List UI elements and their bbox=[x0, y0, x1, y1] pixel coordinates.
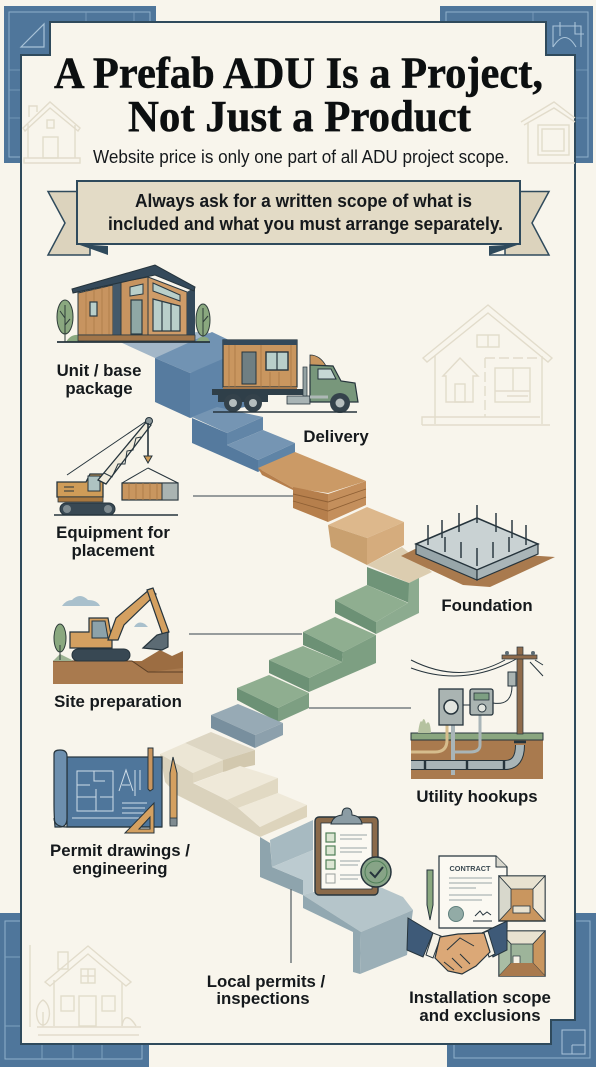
leader lines bbox=[189, 496, 411, 963]
stairs: beige section bbox=[160, 732, 307, 837]
title bbox=[54, 48, 543, 141]
icon: foundation slab bbox=[401, 505, 555, 587]
title: A Prefab ADU Is a Project, bbox=[54, 48, 543, 98]
label: foundation: Foundation bbox=[441, 596, 533, 615]
stairs: grey section bbox=[260, 820, 413, 974]
blueprint corner: bottom right bbox=[447, 913, 596, 1067]
icon: contract and handshake bbox=[407, 856, 545, 976]
ghost house: large right bbox=[422, 305, 552, 425]
icon: blueprint bbox=[54, 748, 177, 833]
label: equipment for placement: Equipment for bbox=[56, 523, 170, 542]
label: unit / base package: package bbox=[65, 379, 133, 398]
blueprint corner: bottom left bbox=[0, 913, 149, 1067]
label: permit drawings / engineering bbox=[50, 841, 190, 878]
label: unit / base package: Unit / base bbox=[57, 361, 141, 380]
label: equipment for placement bbox=[56, 523, 170, 560]
label: local permits / inspections: Local permits / bbox=[207, 972, 326, 991]
label: utility hookups: Utility hookups bbox=[416, 787, 538, 806]
ghost house: header right bbox=[521, 102, 575, 163]
stairs: green section bbox=[237, 567, 419, 722]
ribbon callout: included and what you must arrange separately. bbox=[108, 214, 503, 234]
ghost house: header left bbox=[23, 102, 80, 163]
ribbon callout: Always ask for a written scope of what is bbox=[135, 191, 472, 211]
label: local permits / inspections bbox=[207, 972, 326, 1008]
icon: inspection clipboard bbox=[315, 808, 391, 895]
label: local permits / inspections: inspections bbox=[216, 989, 310, 1008]
stairs: slate step bbox=[211, 704, 283, 748]
label: installation scope and exclusions bbox=[409, 988, 551, 1025]
title: Not Just a Product bbox=[128, 92, 471, 141]
staircase bbox=[120, 331, 432, 974]
icon: excavator bbox=[53, 588, 183, 684]
label: permit drawings / engineering: Permit drawings / bbox=[50, 841, 190, 860]
icon: delivery truck bbox=[212, 340, 358, 413]
label: site preparation: Site preparation bbox=[54, 692, 182, 711]
icon: prefab house bbox=[57, 265, 210, 342]
icon: contract and handshake: CONTRACT bbox=[450, 864, 491, 873]
ghost house: bottom left bbox=[30, 945, 141, 1035]
label: equipment for placement: placement bbox=[71, 541, 155, 560]
stairs: wood section bbox=[258, 452, 432, 583]
icon: utility hookups bbox=[411, 647, 543, 779]
subtitle: Website price is only one part of all ADU project scope. bbox=[93, 147, 509, 167]
stairs: blue section bbox=[120, 331, 295, 472]
label: permit drawings / engineering: engineering bbox=[72, 859, 168, 878]
label: delivery: Delivery bbox=[303, 427, 369, 446]
ribbon callout bbox=[48, 181, 549, 255]
label: installation scope and exclusions: Installation scope bbox=[409, 988, 551, 1007]
blueprint corner: top left bbox=[4, 6, 156, 163]
label: unit / base package bbox=[57, 361, 141, 398]
icon: crane bbox=[54, 418, 178, 515]
blueprint corner: top right bbox=[440, 6, 593, 163]
label: installation scope and exclusions: and exclusions bbox=[419, 1006, 541, 1025]
